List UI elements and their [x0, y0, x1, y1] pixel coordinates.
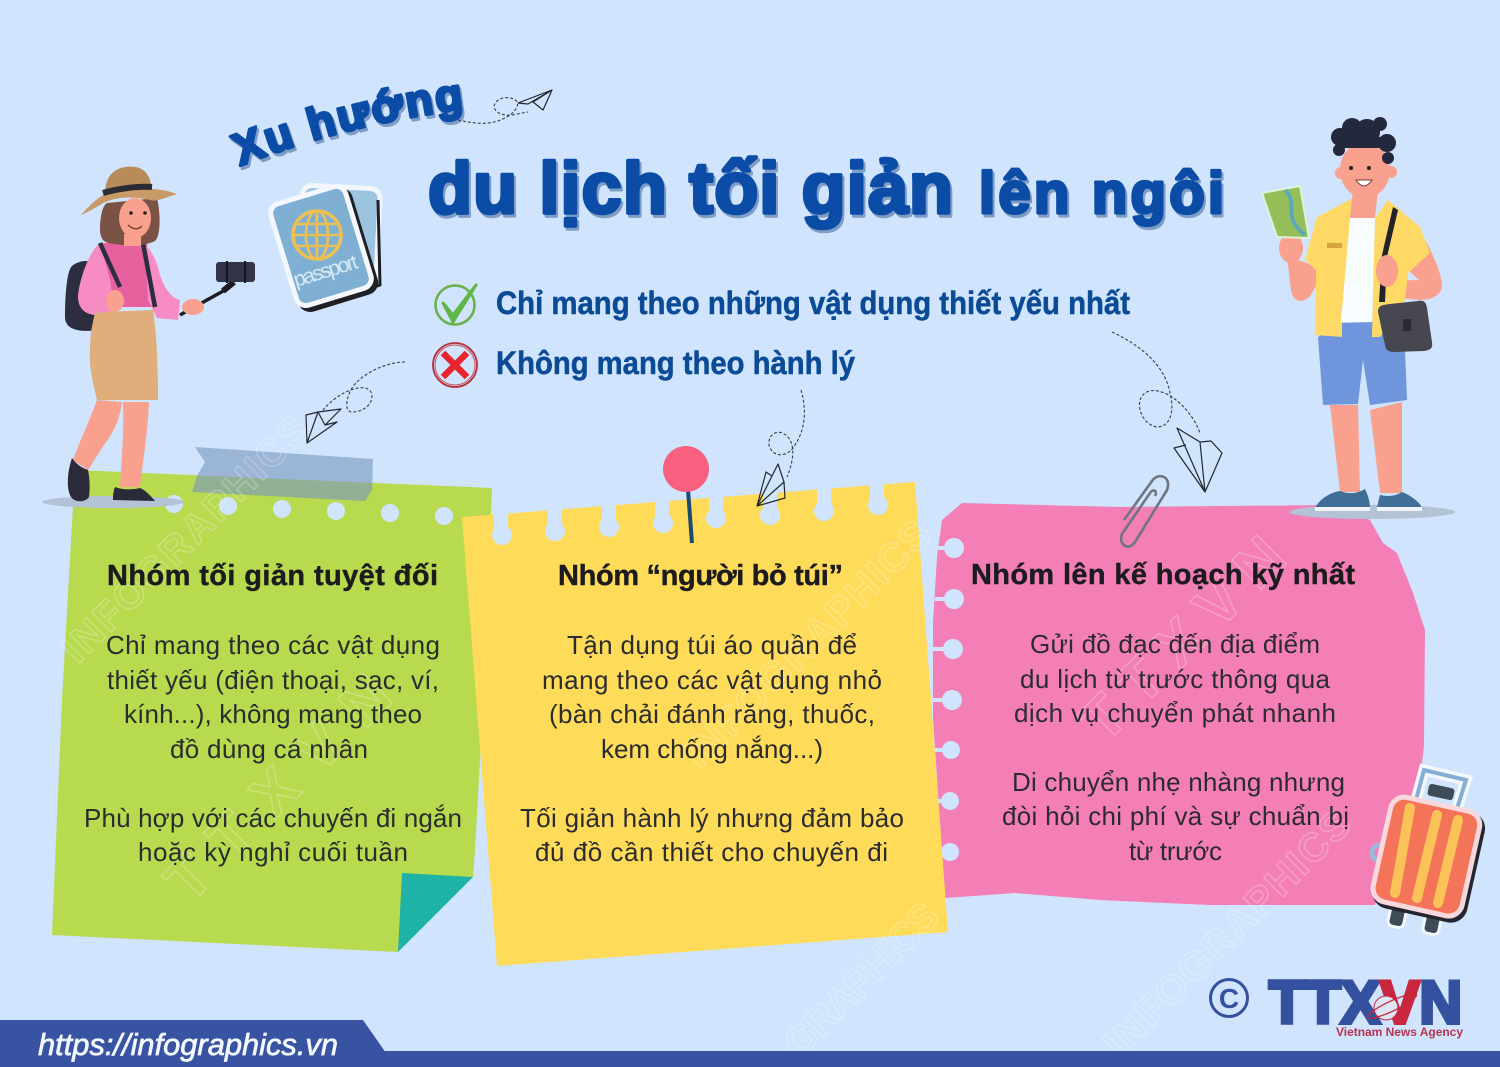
logo: TTXVN: C [1219, 983, 1239, 1014]
watermark: TTXVN [1067, 523, 1298, 754]
text: green note: Nhóm tối giản tuyệt đối [107, 560, 438, 592]
icon: check [436, 285, 476, 324]
text: yellow note: Tận dụng túi áo quần để [567, 630, 857, 660]
icon: paper plane centre [757, 390, 804, 506]
text: yellow note: đủ đồ cần thiết cho chuyến đi [535, 837, 888, 867]
text: green note: Chỉ mang theo các vật dụng [106, 630, 440, 660]
watermark: INFOGRAPHICS [53, 407, 318, 671]
logo: TTXVN: TTXVN [1269, 969, 1462, 1036]
text: green note: Phù hợp với các chuyến đi ngắn [84, 803, 462, 833]
text: green note: đồ dùng cá nhân [170, 734, 368, 764]
icon: paper plane left [306, 362, 405, 443]
text: yellow note: Nhóm “người bỏ túi” [558, 560, 843, 592]
text: pink note: Nhóm lên kế hoạch kỹ nhất [971, 559, 1355, 591]
text: pink note: dịch vụ chuyển phát nhanh [1014, 698, 1336, 728]
icon: paper plane top [458, 90, 552, 123]
title: du lịch tối giản lên ngôi: du lịch tối giản [428, 149, 953, 229]
text: yellow note: (bàn chải đánh răng, thuốc, [549, 699, 875, 729]
text: pink note: Gửi đồ đạc đến địa điểm [1030, 629, 1320, 659]
text: green note: kính...), không mang theo [124, 699, 422, 729]
icon: push pin [663, 446, 709, 543]
text: green note [84, 560, 462, 867]
figure: woman with selfie stick [42, 167, 255, 508]
icon: passport: passport [291, 250, 361, 292]
text: pink note: Di chuyển nhẹ nhàng nhưng [1012, 767, 1345, 797]
icon: cross [433, 343, 477, 387]
shape: tape strip [192, 447, 373, 501]
subtitle: no luggage: Không mang theo hành lý [496, 345, 855, 381]
figure: man with map [1262, 117, 1455, 519]
text: pink note: du lịch từ trước thông qua [1020, 664, 1331, 694]
footer bar [0, 1020, 1500, 1067]
text: pink note [971, 559, 1355, 866]
text: pink note: từ trước [1129, 836, 1222, 866]
watermark: TTXVN [152, 662, 404, 914]
watermark [53, 407, 1360, 1066]
title: Xu hướng: Xu hướng [228, 84, 464, 170]
watermark: INFOGRAPHICS [1095, 802, 1360, 1066]
text: yellow note [520, 560, 904, 867]
text: yellow note: Tối giản hành lý nhưng đảm bảo [520, 803, 904, 833]
text: pink note: đòi hỏi chi phí và sự chuẩn bị [1002, 801, 1349, 831]
icon: paperclip [1121, 476, 1168, 547]
logo: TTXVN: Vietnam News Agency [1336, 1025, 1463, 1039]
watermark: INFOGRAPHICS [675, 512, 940, 776]
text: green note: thiết yếu (điện thoại, sạc, ví, [107, 665, 439, 695]
text: green note: hoặc kỳ nghỉ cuối tuần [138, 837, 408, 867]
panel: pink note [930, 503, 1425, 905]
title: du lịch tối giản lên ngôi [428, 149, 1224, 229]
text: yellow note: kem chống nắng...) [601, 734, 823, 764]
panel: yellow note [462, 480, 948, 966]
icon: passport [268, 184, 381, 312]
subtitle: only essentials: Chỉ mang theo những vật dụng thiết yếu nhất [496, 285, 1130, 321]
icon: paper plane right [1112, 332, 1222, 492]
watermark: GRAPHICS [775, 894, 948, 1066]
text: yellow note: mang theo các vật dụng nhỏ [542, 665, 882, 695]
panel: green note [52, 470, 492, 952]
icon: suitcase [1370, 770, 1485, 935]
footer bar: https://infographics.vn [38, 1027, 338, 1062]
title: du lịch tối giản lên ngôi: lên ngôi [979, 161, 1224, 226]
